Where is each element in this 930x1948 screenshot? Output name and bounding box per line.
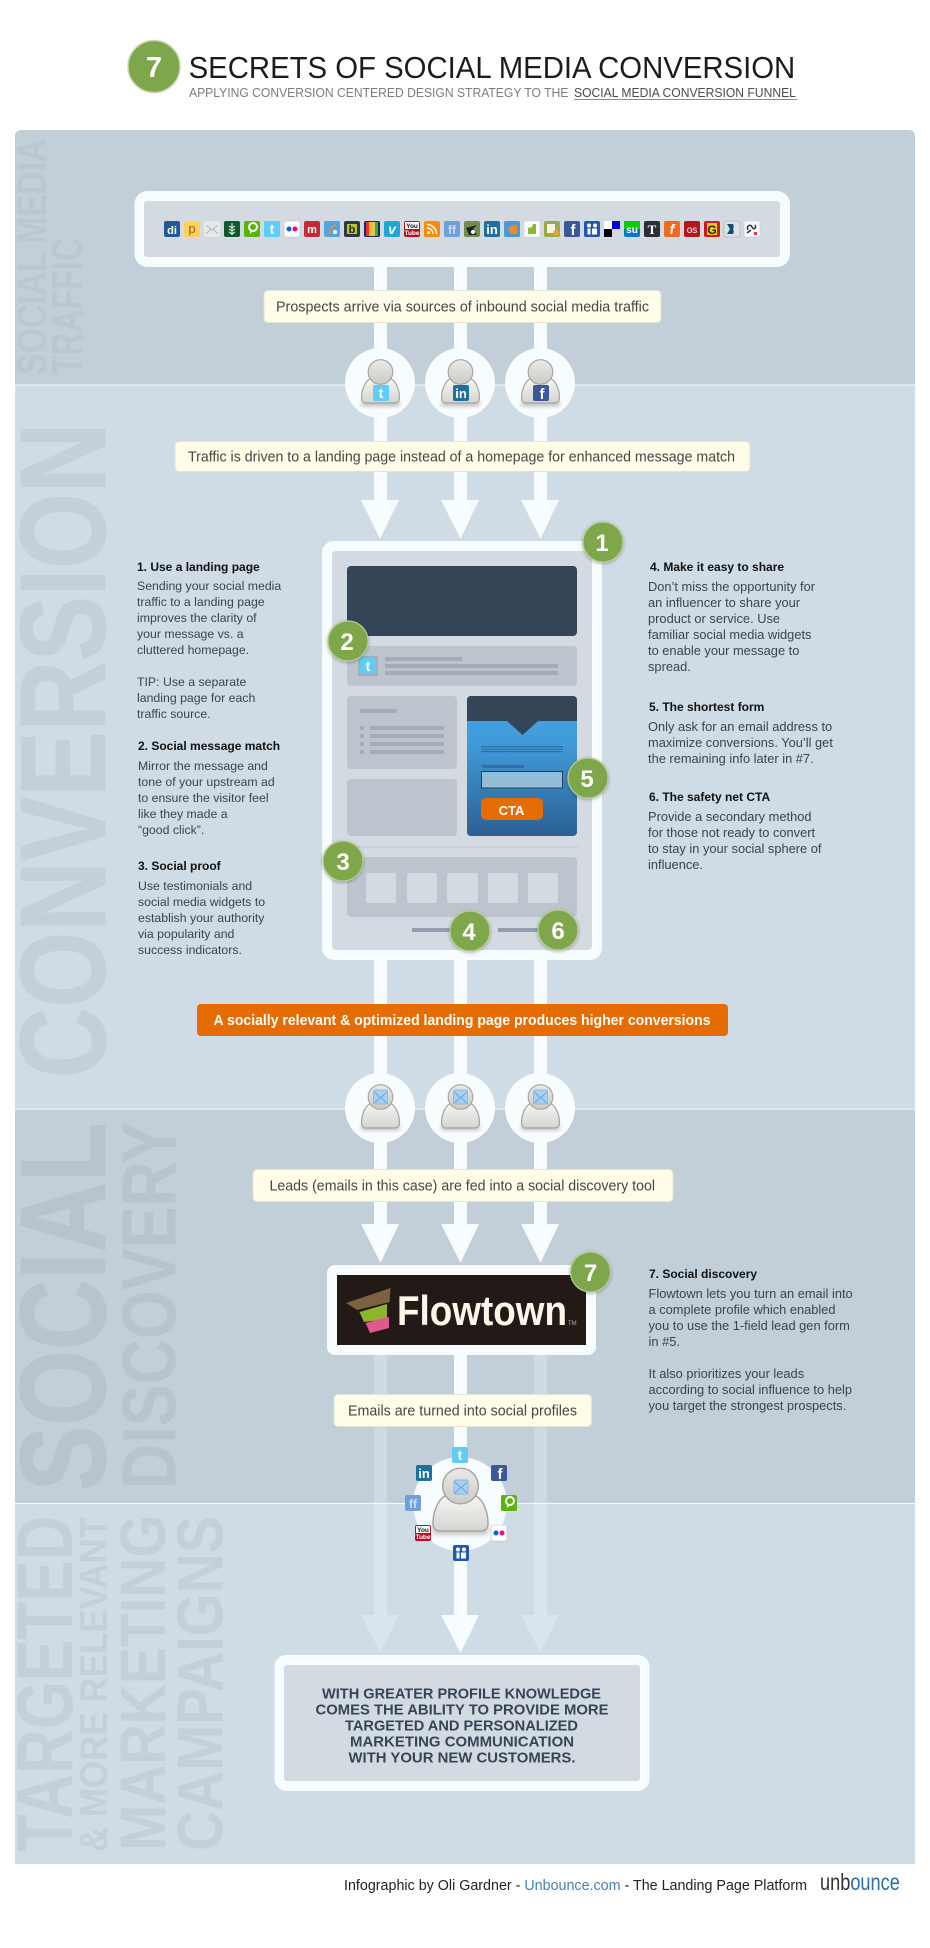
panel: flowtown logo: Flowtown <box>397 1288 567 1335</box>
icon: speech bubble <box>244 221 260 237</box>
tip 7 text <box>648 1286 853 1413</box>
tip 6 text: Provide a secondary method <box>648 809 812 824</box>
tip 3 text: establish your authority <box>138 911 265 925</box>
icon: olive bird <box>464 221 480 237</box>
badge 5: 5 <box>580 766 594 793</box>
section label: targeted marketing campaigns <box>17 1518 223 1851</box>
title heading: SECRETS OF SOCIAL MEDIA CONVERSION <box>189 52 795 85</box>
badge 2: 2 <box>340 629 354 656</box>
icon: posterous: p <box>188 221 196 236</box>
tip 4 text: product or service. Use <box>648 611 780 626</box>
tip 1 text: Sending your social media <box>137 579 281 593</box>
title number badge: 7 <box>146 52 162 84</box>
tip 1 text: your message vs. a <box>137 627 244 641</box>
tip 2 text: like they made a <box>138 807 228 821</box>
icon: typepad T: T <box>648 222 657 237</box>
tip 1 text: TIP: Use a separate <box>137 675 247 689</box>
icon: speech bubble <box>501 1495 517 1511</box>
icon: lastfm: os <box>687 225 697 236</box>
tip 7 text: you target the strongest prospects. <box>648 1398 846 1413</box>
tip 7 text: you to use the 1-field lead gen form <box>648 1318 850 1333</box>
icon: flickr <box>491 1525 507 1541</box>
tip 2 text: Mirror the message and <box>138 759 268 773</box>
stems: landing page to leads <box>374 955 547 1227</box>
subtitle highlight: SOCIAL MEDIA CONVERSION FUNNEL <box>574 86 796 100</box>
tip 3 text: Use testimonials and <box>138 879 252 893</box>
section label: social media traffic: SOCIAL MEDIA <box>8 139 55 375</box>
icon: flickr <box>284 221 300 237</box>
icon: facebook: f <box>498 1466 504 1483</box>
benefits block <box>347 696 457 769</box>
icon: youtube: Tube <box>404 230 420 237</box>
social proof row <box>347 857 577 917</box>
section label: targeted marketing campaigns: CAMPAIGNS <box>163 1516 236 1851</box>
badge 5 <box>568 758 608 798</box>
section label: targeted marketing campaigns: TARGETED <box>2 1516 90 1852</box>
tip 5 heading: 5. The shortest form <box>649 700 764 714</box>
icon: orange f: f <box>670 221 676 237</box>
icon: posterous <box>184 221 200 237</box>
tip 5 text: the remaining info later in #7. <box>648 751 814 766</box>
tip 4 text: familiar social media widgets <box>648 627 811 642</box>
icon: olive pencil <box>544 221 560 237</box>
icon: google reader <box>704 221 720 237</box>
icon: blue share <box>504 221 520 237</box>
tip 3 text: social media widgets to <box>138 895 265 909</box>
icon: youtube: You <box>417 1527 429 1534</box>
icon: friendfeed: ff <box>448 223 457 237</box>
icon: blue feed <box>324 221 340 237</box>
tip 5 text: maximize conversions. You’ll get <box>648 735 833 750</box>
final message text: WITH GREATER PROFILE KNOWLEDGE <box>322 1686 601 1702</box>
icon: myspace <box>453 1545 469 1561</box>
subtitle: APPLYING CONVERSION CENTERED DESIGN STRATEGY TO THE <box>189 86 568 100</box>
text block: tips 4 to 6 <box>648 560 833 872</box>
badge 4: 4 <box>462 919 476 946</box>
tip 1 heading: 1. Use a landing page <box>137 560 260 574</box>
icon: dark b <box>344 221 360 237</box>
badge 1 <box>583 522 623 562</box>
icon: lastfm <box>684 221 700 237</box>
tip 4 heading: 4. Make it easy to share <box>650 560 784 574</box>
footer logo: unbounce <box>820 1870 900 1896</box>
tip 7 heading: 7. Social discovery <box>649 1267 757 1281</box>
tip 7 text: a complete profile which enabled <box>648 1302 836 1317</box>
tip 6 text <box>648 809 822 872</box>
icon: delicious <box>604 221 620 237</box>
tip 1 text <box>137 579 281 721</box>
final message text: TARGETED AND PERSONALIZED <box>345 1718 578 1734</box>
badge 1: 1 <box>595 530 609 557</box>
text block: tip 7 <box>648 1267 853 1413</box>
callout: traffic driven to landing page: Traffic is driven to a landing page instead of a homepage for enhanced message match <box>188 450 735 466</box>
final message text: WITH YOUR NEW CUSTOMERS. <box>348 1750 576 1766</box>
badge 3: 3 <box>336 849 350 876</box>
callout: traffic driven to landing page <box>175 442 750 472</box>
icon: email <box>204 221 220 237</box>
tip 1 text: improves the clarity of <box>137 611 257 625</box>
icon: linkedin <box>484 221 500 237</box>
image block <box>347 779 457 836</box>
icon: email lead 1 <box>345 1073 415 1143</box>
icon: stumbleupon <box>624 221 640 237</box>
panel: final message <box>274 1655 650 1791</box>
icon: twitter user: t <box>379 385 384 401</box>
tip 4 text: an influencer to share your <box>648 595 801 610</box>
callout: prospects arrive <box>264 290 661 322</box>
callout: emails to profiles <box>334 1394 592 1426</box>
badge 7 <box>570 1252 610 1292</box>
icon: plant <box>224 221 240 237</box>
icon: youtube <box>415 1525 431 1541</box>
tip 3 heading: 3. Social proof <box>138 859 222 873</box>
callout: prospects arrive: Prospects arrive via sources of inbound social media traffic <box>276 300 649 316</box>
tip 4 text: spread. <box>648 659 691 674</box>
icon: linkedin user: in <box>455 386 467 401</box>
icon: mixx <box>304 221 320 237</box>
badge 4 <box>450 911 490 951</box>
badge 6: 6 <box>551 918 565 945</box>
arrows: profiles to final message <box>361 1355 559 1653</box>
banner: higher conversions: A socially relevant & optimized landing page produces higher conversions <box>214 1013 710 1029</box>
icon: myspace <box>584 221 600 237</box>
icon: vimeo <box>384 221 400 237</box>
icon: facebook: f <box>570 222 576 239</box>
badge 2 <box>328 621 368 661</box>
final message text: MARKETING COMMUNICATION <box>350 1734 574 1750</box>
hero block <box>347 566 577 636</box>
tip 1 text: landing page for each <box>137 691 255 705</box>
icon: youtube: Tube <box>415 1534 431 1541</box>
tip 4 text <box>648 579 816 674</box>
title number badge <box>128 40 180 92</box>
section label: social media traffic: TRAFFIC <box>43 238 92 375</box>
tip 5 text: Only ask for an email address to <box>648 719 832 734</box>
tip 2 heading: 2. Social message match <box>138 739 280 753</box>
section label: targeted marketing campaigns: & MORE RELEVANT <box>71 1517 115 1852</box>
icon: digg: di <box>167 225 177 237</box>
message match row: t <box>366 658 371 674</box>
tip 7 text: It also prioritizes your leads <box>648 1366 804 1381</box>
section label: social discovery <box>20 1123 176 1488</box>
section label: targeted marketing campaigns: MARKETING <box>107 1514 179 1851</box>
icon: facebook user <box>505 348 575 418</box>
tip 5 text <box>648 719 833 766</box>
callout: emails to profiles: Emails are turned into social profiles <box>348 1404 577 1420</box>
icon: green blob <box>524 221 540 237</box>
tip 1 text: traffic source. <box>137 707 211 721</box>
icon: friendfeed <box>444 221 460 237</box>
footer credit: Infographic by Oli Gardner - Unbounce.com - The Landing Page Platform <box>344 1878 807 1894</box>
icon: google reader: G <box>707 223 717 237</box>
icon: rainbow <box>364 221 380 237</box>
icon: facebook user: f <box>540 386 546 403</box>
icon: dark b: b <box>349 224 356 236</box>
tip 1 text: traffic to a landing page <box>137 595 265 609</box>
icon: linkedin: in <box>486 222 498 237</box>
icon: twitter: t <box>458 1447 463 1463</box>
icon: orange f <box>664 221 680 237</box>
icon: stumbleupon: su <box>626 225 638 236</box>
cta button: CTA <box>499 803 525 818</box>
section label: social discovery: DISCOVERY <box>107 1122 192 1489</box>
icon: squiggle <box>744 221 760 237</box>
final message text <box>316 1686 608 1766</box>
icon: navy blob <box>724 221 740 237</box>
badge 6 <box>538 910 578 950</box>
section label: social media traffic <box>8 139 92 375</box>
tip 6 text: to stay in your social sphere of <box>648 841 822 856</box>
tip 7 text: Flowtown lets you turn an email into <box>648 1286 853 1301</box>
final message text: COMES THE ABILITY TO PROVIDE MORE <box>316 1702 608 1718</box>
tip 6 heading: 6. The safety net CTA <box>649 790 770 804</box>
tip 2 text: “good click”. <box>138 823 204 837</box>
lead form <box>467 696 577 836</box>
panel: flowtown logo: TM <box>568 1321 577 1327</box>
panel: landing page wireframe <box>322 541 602 960</box>
icon: mixx: m <box>307 224 317 236</box>
icon: twitter <box>264 221 280 237</box>
title block <box>128 40 797 100</box>
icon: email lead 3 <box>505 1073 575 1143</box>
icon: linkedin: in <box>418 1466 430 1481</box>
tip 6 text: influence. <box>648 857 703 872</box>
text block: tips 1 to 3 <box>137 560 281 957</box>
icon: digg <box>164 221 180 237</box>
arrows: traffic to landing page <box>361 260 559 539</box>
icon: social profile hub <box>405 1447 517 1561</box>
icon: facebook <box>564 221 580 239</box>
tip 2 text: to ensure the visitor feel <box>138 791 269 805</box>
tip 7 text: in #5. <box>648 1334 680 1349</box>
icon: youtube: You <box>406 223 418 230</box>
tip 6 text: for those not ready to convert <box>648 825 815 840</box>
tip 3 text: success indicators. <box>138 943 242 957</box>
icon: friendfeed: ff <box>409 1497 418 1511</box>
badge 7: 7 <box>584 1260 597 1287</box>
arrows: leads to discovery tool <box>361 1224 559 1263</box>
panel: flowtown logo <box>327 1265 596 1355</box>
icon: email lead 2 <box>425 1073 495 1143</box>
callout: leads fed into tool <box>253 1170 673 1202</box>
callout: leads fed into tool: Leads (emails in this case) are fed into a social discovery tool <box>270 1178 655 1194</box>
tip 2 text: tone of your upstream ad <box>138 775 275 789</box>
icon: rss <box>424 221 440 237</box>
tip 1 text: cluttered homepage. <box>137 643 249 657</box>
badge 3 <box>323 841 363 881</box>
icon: typepad T <box>644 221 660 237</box>
tip 4 text: to enable your message to <box>648 643 799 658</box>
tip 4 text: Don’t miss the opportunity for <box>648 579 816 594</box>
tip 3 text <box>138 879 265 957</box>
icon: youtube <box>404 221 420 237</box>
panel: traffic sources frame <box>134 191 790 267</box>
social icon row <box>164 221 760 239</box>
banner: higher conversions <box>197 1004 728 1036</box>
tip 7 text: according to social influence to help <box>648 1382 852 1397</box>
message match row <box>347 646 577 686</box>
icon: vimeo: v <box>388 221 397 237</box>
tip 3 text: via popularity and <box>138 927 235 941</box>
tip 2 text <box>138 759 275 837</box>
icon: twitter user <box>345 348 415 418</box>
icon: linkedin user <box>425 348 495 418</box>
icon: twitter: t <box>270 221 275 237</box>
